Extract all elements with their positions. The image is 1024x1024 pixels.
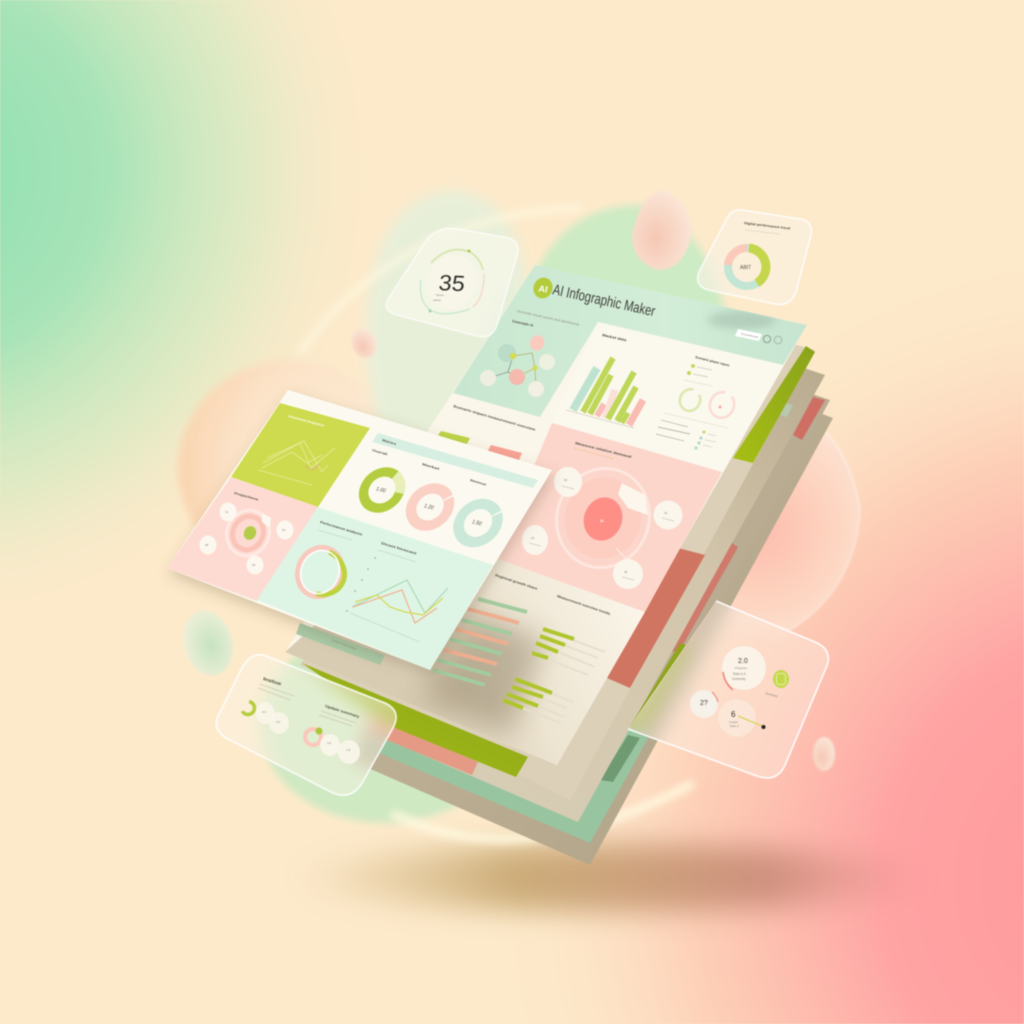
- panel: donut row: Revenue: [470, 478, 487, 487]
- glass card: bottom left mini charts: Update summary: [325, 704, 361, 719]
- card shadow on header: [708, 311, 776, 329]
- satellites: [522, 467, 682, 589]
- floor shadow: [290, 844, 930, 912]
- front sheet: [167, 390, 552, 670]
- satellites: 15: [664, 511, 668, 515]
- glass card backdrop: bottom left: [217, 656, 396, 794]
- glass card: score gauge: rating: [433, 298, 441, 302]
- icon: AI badge: AI: [538, 284, 549, 294]
- panel: donut row: Market: [422, 462, 440, 471]
- glass card: donut summary: [698, 210, 811, 304]
- soft background blobs: [178, 190, 860, 823]
- bar chart: [566, 333, 643, 428]
- glass card: right stats: Progress: [735, 666, 748, 670]
- radial diagram: Measure relative demand: [575, 441, 632, 459]
- glass card: bottom left mini charts: 1.8: [346, 748, 351, 752]
- satellites: 36: [252, 563, 256, 567]
- glass card: right stats: Summary: [732, 677, 746, 681]
- glass card: bottom left mini charts: Instiue: [263, 676, 282, 686]
- block under front sheet: Lorem chart notes: [332, 638, 357, 651]
- header sub text: Generate visual reports and dashboards: [517, 309, 580, 327]
- glass card: bottom left mini charts: [216, 655, 396, 795]
- panel: donut row: [351, 433, 538, 556]
- panel: header and network mint: [453, 265, 807, 417]
- satellites: 12: [225, 510, 229, 514]
- glass card: right stats: Rate & A: [733, 672, 746, 676]
- satellites: 08: [205, 543, 209, 547]
- glass card backdrop: donut: [698, 210, 810, 304]
- glass card backdrop: score: [388, 230, 518, 336]
- donut: mint: [441, 490, 515, 556]
- glass card: score gauge: [386, 228, 518, 337]
- network diagram: [480, 333, 555, 397]
- lower left summary: [437, 404, 536, 460]
- satellites: 30: [564, 478, 568, 482]
- side legend and rings: Scenario phase report: [695, 355, 731, 368]
- main sheet: [285, 265, 807, 765]
- header sub text: [512, 309, 580, 328]
- sheet 3: beige with salmon: [365, 290, 825, 822]
- satellites: 48: [624, 570, 628, 574]
- ring gauge: [288, 541, 352, 603]
- satellites: [200, 502, 294, 574]
- header button and icons: [735, 329, 782, 344]
- donut: lime: 1.00: [375, 486, 387, 494]
- lower left summary: Scenario impact measurement overview: [453, 404, 536, 432]
- panel: lime line chart: Automated projection: [288, 414, 325, 428]
- panel: lime line chart: [231, 403, 370, 507]
- glowing halo ring arcs: [300, 208, 690, 839]
- horizontal lime bars: [503, 594, 611, 723]
- title: [530, 275, 657, 320]
- satellites: 24: [282, 528, 286, 532]
- sheet 4: green band: [360, 320, 830, 843]
- glass card backdrop: right: [630, 601, 828, 778]
- panel: mint charts: Direct forecast: [381, 541, 418, 556]
- glass card: right stats: [628, 601, 828, 778]
- sheet 5: beige: [350, 330, 833, 865]
- radial diagram: [522, 441, 682, 589]
- panel: pink radial: [167, 477, 318, 601]
- panel: white bar chart section: [552, 322, 783, 472]
- floating eggs: [176, 190, 835, 771]
- glass card: donut summary: ABIT: [740, 265, 751, 271]
- glass card: right stats: 2.0: [738, 658, 748, 665]
- title text: AI Infographic Maker: [551, 281, 657, 320]
- side legend and rings: [656, 355, 738, 450]
- stacked back sheets: [300, 280, 833, 865]
- sheet 2: beige with lime: [300, 280, 815, 800]
- glass card: right stats: Rate A: [730, 724, 739, 728]
- donut: pink: [394, 475, 466, 539]
- score number: 35: [437, 270, 466, 296]
- glass card: bottom left mini charts: 4.0: [262, 710, 267, 714]
- glass card: donut summary: Digital performance trend: [744, 221, 790, 231]
- panel: mint charts: [257, 507, 493, 670]
- horizontal bars list: Regional growth share: [495, 573, 538, 591]
- donut: mint: 1.50: [471, 519, 483, 527]
- glass card: right stats: 6: [731, 710, 736, 719]
- panel: mint charts: Performance analysis: [320, 520, 363, 537]
- glass card: bottom left mini charts: 3.4: [276, 720, 281, 724]
- panel: pink radial section: [495, 423, 722, 612]
- panel: bottom report section: [285, 530, 645, 765]
- donut: lime: [351, 462, 413, 518]
- glass card: right stats: Impact: [729, 720, 738, 724]
- panel: pink radial: Projections: [234, 491, 259, 502]
- block under front sheet: [296, 623, 385, 665]
- glass card: right stats: 2?: [700, 700, 708, 707]
- satellites: 22: [531, 536, 535, 540]
- bar chart: Market data: [602, 333, 627, 342]
- shadow from front sheet: [420, 610, 545, 735]
- line chart: [346, 557, 448, 642]
- glass card: bottom left mini charts: 3.6: [327, 741, 332, 745]
- radial diagram: 12: [600, 519, 604, 523]
- panel: donut row: Metrics: [382, 438, 397, 446]
- horizontal lime bars: Measurement overview trends: [557, 594, 611, 616]
- horizontal bars list: [433, 573, 538, 685]
- glass card: score gauge: Score: [436, 293, 444, 297]
- header button and icons: Download: [741, 332, 759, 339]
- donut: pink: 1.20: [423, 503, 435, 511]
- icon: lime badge: [773, 670, 789, 688]
- header sub text: Concepts in: [512, 319, 534, 328]
- glass card: right stats: Summary: [765, 691, 779, 698]
- panel: donut row: Overall: [372, 448, 388, 456]
